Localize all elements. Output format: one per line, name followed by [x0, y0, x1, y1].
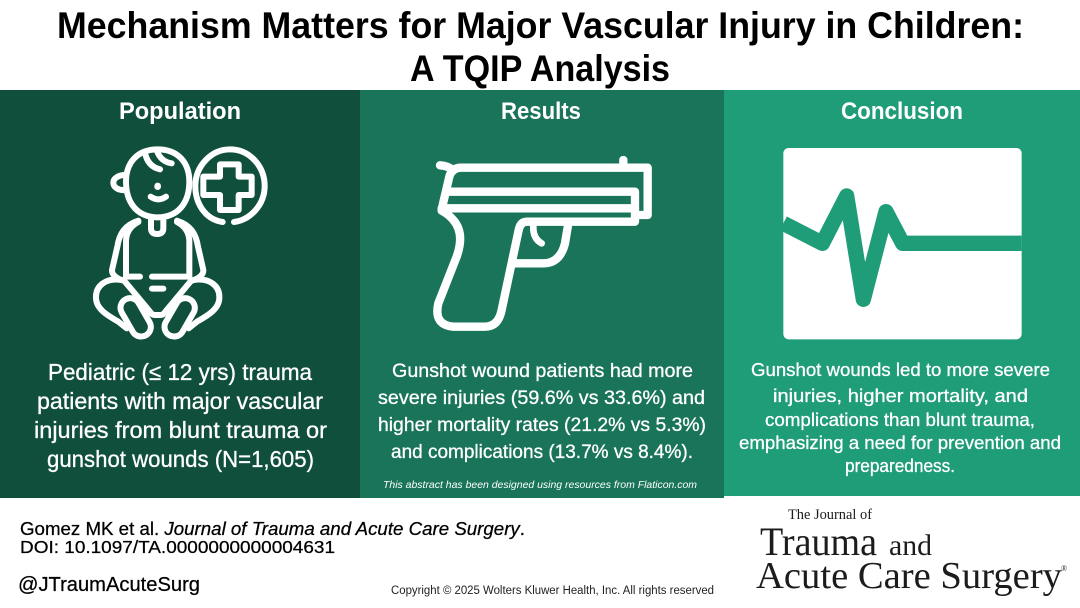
- panel: conclusion: [724, 90, 1080, 496]
- copyright: Copyright © 2025 Wolters Kluwer Health, Inc. All rights reserved: [391, 585, 714, 597]
- title: Mechanism Matters for Major Vascular Injury in Children:: [57, 5, 1024, 46]
- journal logo: Acute Care Surgery: [756, 555, 1062, 597]
- text: conclusion description: complications than blunt trauma,: [765, 409, 1035, 430]
- text: results description: and complications (13.7% vs 8.4%).: [391, 441, 693, 463]
- journal logo: and: [889, 529, 932, 562]
- attribution note: This abstract has been designed using resources from Flaticon.com: [383, 479, 697, 491]
- text: conclusion description: [739, 359, 1061, 476]
- heading: results: Results: [501, 98, 581, 125]
- text: conclusion description: preparedness.: [845, 455, 955, 476]
- panel: population: [0, 90, 360, 498]
- title: [57, 5, 1024, 89]
- text: population description: gunshot wounds (N=1,605): [47, 446, 314, 472]
- text: population description: Pediatric (≤ 12 yrs) trauma: [48, 359, 312, 385]
- text: population description: patients with major vascular: [37, 388, 323, 414]
- journal logo: [756, 507, 1067, 597]
- journal logo: ®: [1061, 564, 1067, 573]
- text: results description: Gunshot wound patients had more: [392, 360, 693, 382]
- citation: [20, 519, 525, 557]
- journal logo: The Journal of: [788, 507, 872, 523]
- text: results description: severe injuries (59.6% vs 33.6%) and: [378, 387, 705, 409]
- text: conclusion description: emphasizing a need for prevention and: [739, 432, 1061, 453]
- text: population description: injuries from blunt trauma or: [34, 417, 327, 443]
- citation: DOI: 10.1097/TA.0000000000004631: [20, 537, 335, 557]
- journal logo: Trauma: [760, 519, 877, 564]
- text: conclusion description: injuries, higher mortality, and: [773, 385, 1028, 406]
- icon: baby with medical cross: [96, 149, 265, 340]
- heading: conclusion: Conclusion: [841, 98, 963, 125]
- heading: population: Population: [119, 98, 241, 125]
- icon: handgun: [437, 160, 648, 327]
- social handle: @JTraumAcuteSurg: [18, 574, 200, 596]
- citation: Gomez MK et al. Journal of Trauma and Acute Care Surgery .: [20, 519, 525, 539]
- panel: results: [360, 90, 724, 498]
- text: results description: [378, 360, 706, 463]
- icon: heartbeat monitor: [783, 148, 1022, 339]
- text: population description: [34, 359, 327, 472]
- title: A TQIP Analysis: [410, 48, 670, 89]
- text: results description: higher mortality rates (21.2% vs 5.3%): [378, 414, 706, 436]
- text: conclusion description: Gunshot wounds led to more severe: [751, 359, 1050, 380]
